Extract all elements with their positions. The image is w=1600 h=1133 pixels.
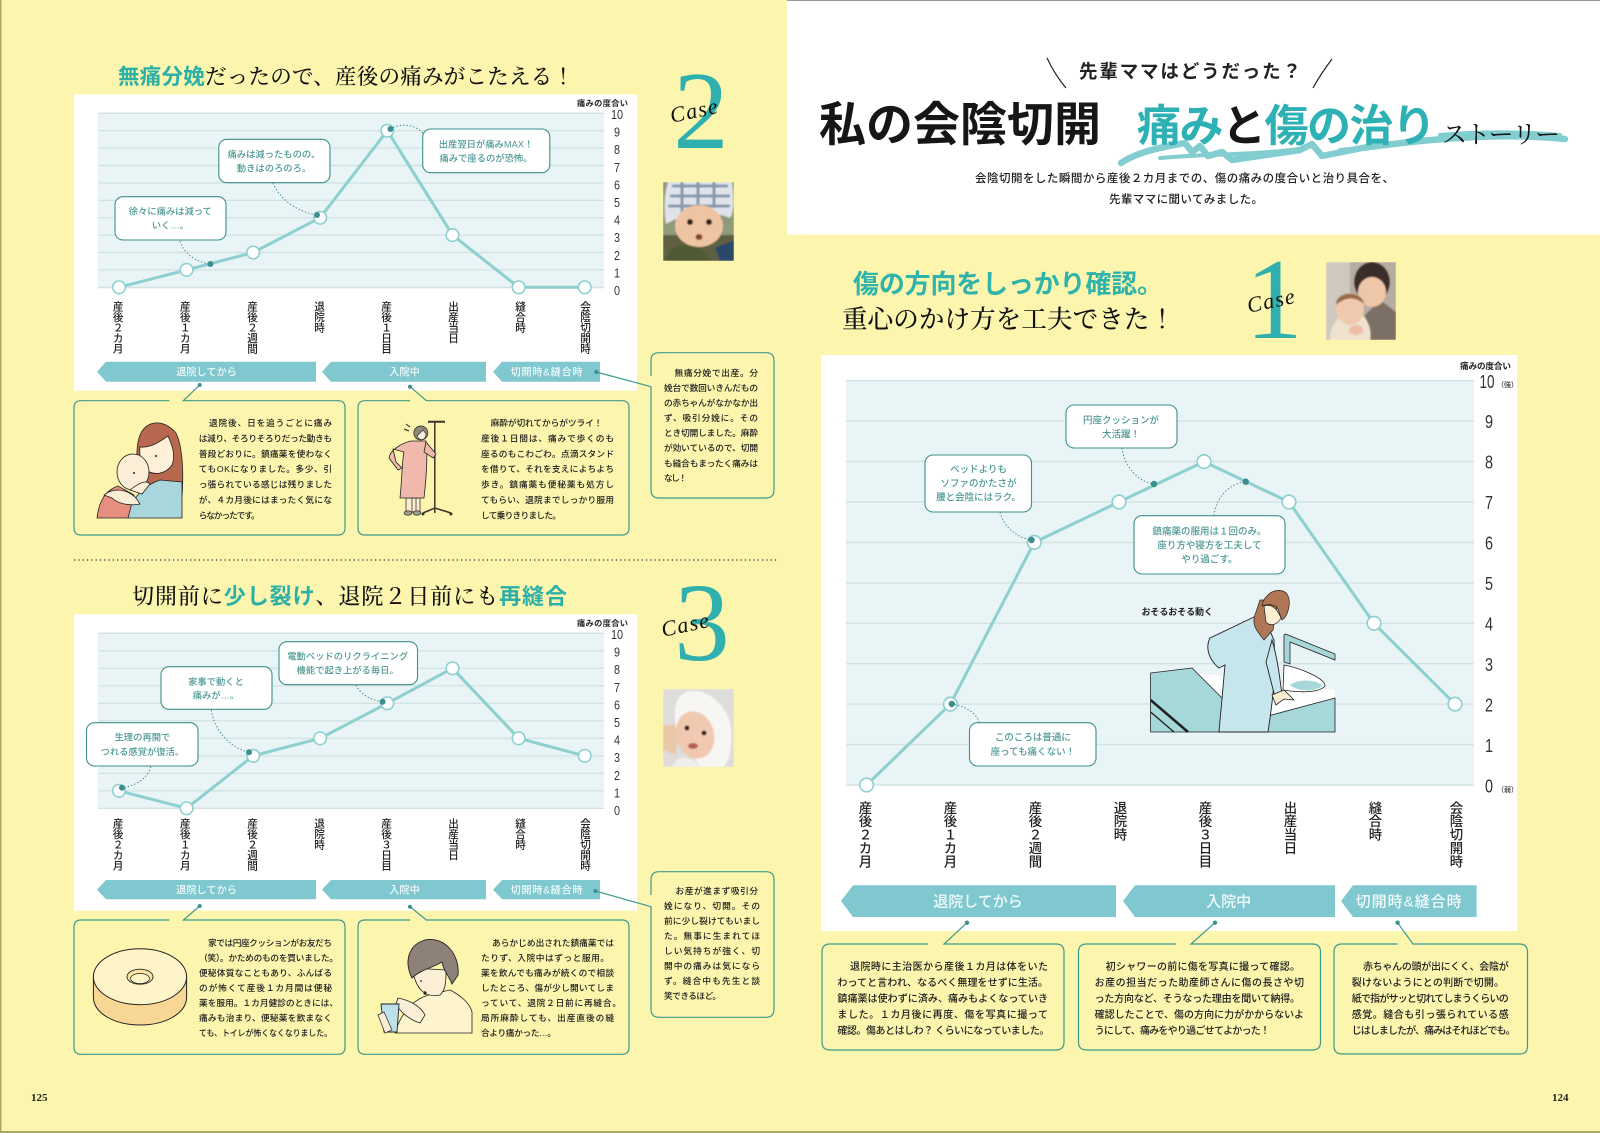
callout: housework: [161, 667, 272, 755]
title panel: [787, 0, 1600, 234]
y axis: 2: [614, 248, 620, 263]
text box: case 3 after discharge: （笑）。かためのものを買いました。: [199, 952, 338, 963]
x axis labels: 産後１カ月: [942, 800, 957, 869]
y axis: [1460, 360, 1518, 796]
intro text: [975, 171, 1394, 206]
callout: gradually easing: [115, 197, 226, 267]
x axis labels: 縫合時: [514, 817, 526, 850]
y axis: 10: [1480, 372, 1494, 392]
text box: case 3 at incision: 娩になり、切開。その: [664, 900, 760, 911]
y axis: 2: [1485, 696, 1493, 716]
phase arrows: 入院中: [389, 365, 420, 378]
callout: no pain sitting: このころは普通に: [995, 732, 1071, 744]
heading: case 1: 重心のかけ方を工夫できた！: [842, 305, 1175, 334]
x axis labels: 産後１カ月: [179, 817, 191, 872]
callout: max pain: 痛みで座るのが恐怖。: [440, 153, 532, 164]
text box: case 2 after discharge: らなかったです。: [199, 510, 260, 520]
text box: case 1 after discharge: 確認。傷あとはしわ？ くらいになっていました。: [837, 1024, 1049, 1037]
illustration: woman getting out of bed: おそるおそる動く: [1142, 606, 1213, 617]
x axis labels: 退院時: [313, 818, 325, 850]
y axis: 9: [1485, 412, 1493, 432]
text box: case 3 in hospital: [358, 905, 629, 1054]
divider: [74, 559, 778, 561]
y axis: 7: [614, 680, 620, 695]
x axis labels: [112, 300, 591, 355]
text box: case 3 after discharge: 便秘体質なこともあり、ふんばる: [199, 967, 332, 978]
text box: case 1 at incision: 感覚。縫合も引っ張られている感: [1352, 1008, 1509, 1021]
y axis: （強）: [1497, 380, 1518, 389]
text box: case 3 in hospital: あらかじめ出された鎮痛薬では: [492, 937, 614, 948]
callout: reclining bed: 電動ベッドのリクライニング: [287, 650, 408, 661]
text box: case 2 after discharge: が、４カ月後にはまったく気にな: [199, 494, 332, 505]
intro text: 会陰切開をした瞬間から産後２カ月までの、傷の痛みの度合いと治り具合を、: [975, 171, 1394, 185]
callout: cushion: 円座クッションが: [1083, 414, 1159, 426]
case 3 mark: 3: [674, 562, 730, 685]
phase arrows: 退院してから: [176, 366, 237, 378]
text box: case 2 in hospital: 歩き。鎮痛薬も便秘薬も処方し: [481, 479, 614, 490]
y axis: 4: [614, 733, 620, 748]
y axis: 9: [614, 125, 620, 140]
y axis: 4: [1485, 614, 1493, 634]
text box: case 2 in hospital: てもらい、退院までしっかり服用: [481, 495, 614, 505]
y axis: 3: [614, 750, 620, 765]
y axis: 1: [614, 785, 620, 800]
x axis labels: [112, 817, 591, 872]
y axis: 8: [614, 662, 620, 677]
x axis labels: 出産当日: [447, 818, 459, 860]
eyebrow text: 先輩ママはどうだった？: [1079, 61, 1301, 82]
phase arrows: 切開時&縫合時: [510, 883, 582, 896]
y axis: [577, 618, 628, 818]
text box: case 2 at incision: の赤ちゃんがなかなか出: [664, 397, 758, 408]
text box: case 1 in hospital: うにして、痛みをやり過ごせてよかった！: [1095, 1024, 1270, 1037]
callout: painkiller: 鎮痛薬の服用は１回のみ。: [1152, 525, 1267, 537]
x axis labels: 産後３日目: [380, 817, 392, 871]
text box: case 2 at incision: 無痛分娩で出産。分: [674, 367, 758, 378]
text box: case 2 at incision: [594, 353, 774, 498]
text box: case 2 after discharge: は減り、そろりそろりだった動きも: [199, 432, 332, 443]
x axis labels: 縫合時: [1366, 800, 1382, 842]
text box: case 2 at incision: が効いているので、切開: [664, 442, 758, 453]
callout: max pain: [388, 125, 550, 173]
y axis: （弱）: [1497, 786, 1518, 794]
text box: case 2 at incision: も縫合もまったく痛みは: [664, 458, 758, 468]
callout: slow movement: 痛みは減ったものの、: [228, 149, 320, 160]
y axis: 5: [614, 715, 620, 730]
text box: case 2 after discharge: てもOKになりました。多少、引: [199, 463, 332, 474]
text box: case 3 after discharge: のが怖くて産後１カ月間は便秘: [199, 982, 332, 993]
text box: case 2 after discharge: [74, 383, 345, 535]
y axis: 3: [1485, 655, 1493, 675]
text box: case 1 at incision: 紙で指がサッと切れてしまうくらいの: [1352, 992, 1509, 1005]
text box: case 3 after discharge: 痛みも治まり、便秘薬を飲まなく: [199, 1012, 332, 1023]
phase arrows: [97, 880, 600, 899]
callout: gradually easing: いく…。: [152, 220, 189, 230]
y axis: 痛みの度合い: [1460, 360, 1511, 371]
phase arrows: 退院してから: [176, 884, 237, 896]
panel: case 1 chart: [821, 355, 1518, 931]
callout: slow movement: [219, 139, 330, 218]
pain line: [113, 124, 591, 294]
heading: case 2: 無痛分娩だったので、産後の痛みがこたえる！: [118, 65, 574, 89]
y axis: 5: [1485, 574, 1493, 594]
text box: case 2 at incision: なし！: [664, 473, 687, 483]
case 1 mark: Case: [1245, 283, 1297, 318]
callout: painkiller: やり過ごす。: [1181, 554, 1238, 566]
x axis labels: 産後２カ月: [856, 800, 872, 869]
x axis labels: 退院時: [1112, 801, 1127, 842]
y axis: 3: [614, 230, 620, 245]
main title: 痛みと傷の治り: [1137, 102, 1436, 151]
x axis labels: 会陰切開時: [579, 817, 591, 871]
text box: case 2 in hospital: して乗りきりました。: [481, 509, 561, 520]
x axis labels: 縫合時: [514, 300, 526, 333]
callout: cushion: [1066, 405, 1177, 487]
text box: case 1 after discharge: 退院時に主治医から産後１カ月は体をいた: [850, 960, 1048, 973]
y axis: 0: [614, 283, 620, 298]
illustration: woman with IV stand: [389, 422, 452, 516]
text box: case 3 at incision: 開中の痛みは気になら: [664, 960, 760, 971]
x axis labels: 産後２週間: [246, 817, 258, 872]
callout: reclining bed: [279, 642, 418, 705]
x axis labels: 産後１カ月: [179, 300, 191, 355]
photo: case 2 baby with hat: [663, 182, 734, 261]
callout: cushion: 大活躍！: [1102, 429, 1140, 441]
case 2 mark: 2: [673, 50, 729, 173]
text box: case 2 in hospital: [358, 385, 629, 535]
text box: case 1 in hospital: お産の担当だった助産師さんに傷の長さや切: [1095, 976, 1304, 989]
y axis: 10: [611, 107, 623, 122]
grid lines: [98, 633, 604, 808]
text box: case 2 at incision: 娩台で数回いきんだもの: [664, 382, 758, 393]
text box: case 3 at incision: 前に少し裂けてもいまし: [664, 915, 760, 926]
y axis: 1: [614, 265, 620, 280]
y axis: 1: [1485, 736, 1493, 756]
eyebrow text: [1047, 58, 1332, 88]
y axis: 5: [614, 195, 620, 210]
text box: case 2 in hospital: 産後１日間は、痛みで歩くのも: [481, 432, 614, 443]
callout: period returned: 生理の再開で: [115, 732, 170, 743]
case 3 mark: Case: [659, 607, 711, 642]
callout: slow movement: 動きはのろのろ。: [237, 163, 311, 174]
text box: case 1 at incision: 赤ちゃんの頭が出にくく、会陰が: [1363, 960, 1509, 973]
text box: case 3 after discharge: [74, 904, 345, 1054]
text box: case 2 in hospital: 座るのもこわごわ。点滴スタンド: [481, 448, 614, 459]
y axis: 0: [1485, 776, 1493, 796]
text box: case 1 at incision: [1334, 920, 1528, 1054]
brush stroke: [1121, 132, 1565, 163]
y axis: 10: [611, 627, 623, 642]
y axis: 0: [614, 803, 620, 818]
phase arrows: 退院してから: [933, 894, 1023, 910]
text box: case 3 in hospital: たりず、入院中はずっと服用。: [481, 952, 609, 963]
text box: case 3 at incision: [594, 872, 774, 1017]
case 1 mark: 1: [1245, 236, 1303, 363]
x axis labels: 産後２週間: [1026, 800, 1042, 868]
text box: case 3 after discharge: 家では円座クッションがお友だち: [208, 937, 332, 948]
y axis: 7: [614, 160, 620, 175]
panel: case 3 chart: [74, 614, 637, 911]
text box: case 1 in hospital: 確認したことで、傷の方向に力がかからないよ: [1095, 1008, 1304, 1021]
text box: case 2 in hospital: を借りて、それを支えによちよち: [481, 463, 614, 474]
text box: case 2 after discharge: 退院後、日を追うごとに痛み: [209, 417, 332, 428]
text box: case 2 in hospital: 麻酔が切れてからがツライ！: [491, 417, 602, 428]
grid lines: [846, 381, 1474, 785]
page number 124: 124: [1552, 1092, 1569, 1104]
text box: case 1 after discharge: [822, 920, 1064, 1050]
text box: case 2 at incision: ず、吸引分娩に。その: [664, 412, 758, 423]
phase arrows: 入院中: [1206, 894, 1251, 910]
x axis labels: 出産当日: [447, 301, 459, 343]
text box: case 1 after discharge: ました。１カ月後に再度、傷を写真に撮って: [837, 1008, 1048, 1021]
text box: case 3 in hospital: っていて、退院２日前に再縫合。: [481, 997, 621, 1008]
callout: no pain sitting: 座っても痛くない！: [991, 746, 1075, 758]
intro text: 先輩ママに聞いてみました。: [1109, 192, 1263, 206]
text box: case 3 at incision: 笑できるほど。: [664, 990, 721, 1001]
callout: sofa: ソファのかたさが: [940, 478, 1017, 490]
text box: case 3 in hospital: したところ、傷が少し開いてしま: [481, 982, 614, 993]
text box: case 1 at incision: じはしましたが、痛みはそれほどでも。: [1352, 1024, 1516, 1037]
text box: case 2 at incision: とき切開しました。麻酔: [664, 427, 758, 438]
phase arrows: [97, 362, 600, 382]
text box: case 3 in hospital: 薬を飲んでも痛みが続くので相談: [481, 967, 614, 978]
x axis labels: 産後１日目: [380, 300, 392, 354]
text box: case 1 at incision: 裂けないようにとの判断で切開。: [1352, 976, 1504, 989]
x axis labels: 産後２カ月: [112, 817, 124, 872]
y axis: 6: [614, 697, 620, 712]
pain line: [113, 662, 591, 815]
callout: sofa: [925, 455, 1035, 543]
callout: housework: 家事で動くと: [188, 676, 244, 687]
main title: ストーリー: [1442, 122, 1560, 149]
phase arrows: [841, 885, 1477, 917]
text box: case 2 after discharge: っ張られている感じは残りました: [199, 479, 332, 490]
heading: case 3: 切開前に少し裂け、退院２日前にも再縫合: [132, 584, 567, 609]
photo: case 1 mother and baby: [1326, 262, 1396, 340]
main title: 私の会陰切開: [819, 98, 1101, 151]
y axis: [577, 98, 628, 298]
panel: case 2 chart: [74, 94, 637, 391]
callout: sofa: ベッドよりも: [950, 465, 1007, 476]
x axis labels: 会陰切開時: [579, 300, 591, 354]
heading: case 1: [842, 269, 1175, 334]
x axis labels: 出産当日: [1282, 801, 1297, 855]
x axis labels: 退院時: [313, 301, 325, 333]
text box: case 1 after discharge: 鎮痛薬は使わずに済み、痛みもよくなっていき: [837, 992, 1048, 1005]
text box: case 1 in hospital: [1078, 920, 1320, 1050]
x axis labels: 会陰切開時: [1448, 801, 1463, 868]
callout: painkiller: 座り方や寝方を工夫して: [1157, 539, 1262, 551]
x axis labels: 産後２カ月: [112, 300, 124, 355]
x axis labels: [856, 800, 1463, 869]
text box: case 3 at incision: ず。縫合中も先生と談: [664, 975, 760, 986]
phase arrows: 切開時&縫合時: [510, 365, 582, 378]
illustration: mother holding baby: [97, 423, 183, 518]
illustration: woman getting out of bed: [1142, 590, 1335, 732]
text box: case 3 in hospital: 合より痛かった…。: [481, 1027, 556, 1038]
y axis: 2: [614, 768, 620, 783]
y axis: 8: [1485, 452, 1493, 472]
text box: case 2 after discharge: 普段どおりに。鎮痛薬を使わなく: [199, 448, 332, 459]
callout: max pain: 出産翌日が痛みMAX！: [439, 139, 533, 150]
text box: case 3 after discharge: ても、トイレが怖くなくなりました。: [199, 1027, 332, 1038]
callout: reclining bed: 機能で起き上がる毎日。: [297, 664, 399, 675]
main title: [819, 98, 1560, 151]
grid lines: [98, 113, 604, 287]
callout: no pain sitting: [949, 701, 1096, 766]
photo: case 3 baby with white bonnet: [663, 689, 734, 767]
case 2 mark: Case: [668, 93, 720, 128]
x axis labels: 産後２週間: [246, 300, 258, 355]
callout: period returned: [86, 723, 198, 791]
illustration: woman taking medicine: [378, 939, 472, 1033]
pain line: [860, 455, 1462, 792]
text box: case 3 in hospital: 局所麻酔しても、出産直後の縫: [481, 1012, 614, 1023]
y axis: 6: [614, 177, 620, 192]
heading: case 1: 傷の方向をしっかり確認。: [853, 269, 1163, 299]
y axis: 8: [614, 142, 620, 157]
text box: case 1 in hospital: 初シャワーの前に傷を写真に撮って確認。: [1106, 960, 1300, 973]
text box: case 3 at incision: しい気持ちが強く、切: [664, 945, 760, 956]
callout: sofa: 腰と会陰にはラク。: [936, 492, 1021, 504]
callout: period returned: つれる感覚が復活。: [101, 746, 184, 757]
callout: gradually easing: 徐々に痛みは減って: [129, 205, 212, 216]
phase arrows: 入院中: [389, 883, 420, 896]
text box: case 3 at incision: た。無事に生まれてほ: [664, 930, 760, 941]
y axis: 痛みの度合い: [577, 618, 628, 628]
text box: case 3 at incision: お産が進まず吸引分: [676, 885, 758, 896]
text box: case 1 after discharge: わってと言われ、なるべく無理をせずに生活。: [837, 976, 1048, 989]
y axis: 痛みの度合い: [577, 98, 628, 108]
illustration: donut cushion: [93, 949, 187, 1025]
callout: painkiller: [1134, 478, 1285, 574]
text box: case 1 in hospital: った方向など、そうなった理由を聞いて納得。: [1095, 992, 1300, 1005]
y axis: 6: [1485, 534, 1493, 554]
page number 125: 125: [31, 1092, 48, 1104]
y axis: 9: [614, 645, 620, 660]
text box: case 3 after discharge: 薬を服用。１カ月健診のときには、: [199, 997, 338, 1008]
y axis: 4: [614, 213, 620, 228]
phase arrows: 切開時&縫合時: [1356, 892, 1462, 910]
y axis: 7: [1485, 493, 1493, 513]
callout: housework: 痛みが…。: [193, 689, 239, 700]
x axis labels: 産後３日目: [1196, 800, 1212, 868]
